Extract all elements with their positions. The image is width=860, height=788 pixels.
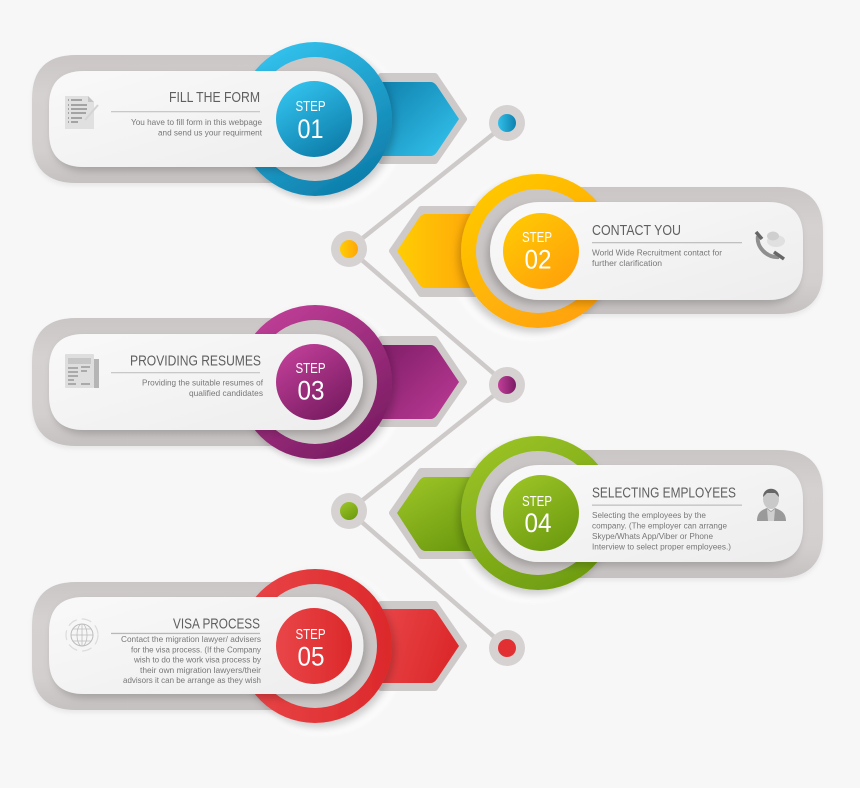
step label 04: STEP <box>522 493 552 510</box>
panel: step 03 providing resumes <box>32 304 464 472</box>
node: blue dot <box>489 105 525 141</box>
step label 03 <box>296 360 326 406</box>
text: step 03 description <box>142 378 264 398</box>
node: yellow dot <box>331 231 367 267</box>
step label 05 <box>296 626 326 672</box>
icon: telephone <box>756 232 785 259</box>
text: step 05 description: their own migration lawyers/their <box>140 665 261 675</box>
text: step 03 description: Providing the suitable resumes of <box>142 378 264 388</box>
heading: visa process: VISA PROCESS <box>173 616 260 632</box>
text: step 01 description: and send us your requirment <box>158 128 263 138</box>
text: step 02 description: World Wide Recruitment contact for <box>592 248 722 258</box>
icon: globe <box>66 619 98 651</box>
text: step 05 description: Contact the migration lawyer/ advisers <box>121 634 261 644</box>
node: purple dot <box>489 367 525 403</box>
panel: step 01 fill the form <box>32 41 464 209</box>
step label 01: STEP <box>296 98 326 115</box>
panel: step 02 contact you <box>392 173 823 341</box>
text: step 05 description: advisors it can be arrange as they wish <box>123 675 261 685</box>
icon: form document <box>65 96 98 129</box>
text: step 04 description: Selecting the employees by the <box>592 510 706 520</box>
heading: contact you: CONTACT YOU <box>592 222 681 239</box>
text: step 05 description: wish to do the work visa process by <box>133 654 262 664</box>
text: step 04 description: company. (The employer can arrange <box>592 520 727 530</box>
step label 02: 02 <box>524 244 552 274</box>
step label 04: 04 <box>524 508 552 538</box>
step label 05: 05 <box>298 642 324 672</box>
heading: providing resumes: PROVIDING RESUMES <box>130 352 261 370</box>
panel: step 04 selecting employees <box>392 435 823 603</box>
step label 02: STEP <box>522 229 552 246</box>
text: step 05 description <box>121 634 262 685</box>
heading: selecting employees: SELECTING EMPLOYEES <box>592 484 736 502</box>
step label 05: STEP <box>296 626 326 643</box>
step label 03: STEP <box>296 360 326 377</box>
step label 02 <box>522 229 552 274</box>
text: step 04 description: Interview to select proper employees.) <box>592 542 731 552</box>
node: red dot <box>489 630 525 666</box>
step label 04 <box>522 493 552 538</box>
step label 01: 01 <box>298 114 324 144</box>
text: step 05 description: for the visa process. (If the Company <box>131 644 262 654</box>
text: step 03 description: qualified candidates <box>189 388 263 398</box>
text: step 04 description: Skype/Whats App/Viber or Phone <box>592 531 713 541</box>
icon: newspaper <box>65 354 99 388</box>
step label 01 <box>296 98 326 144</box>
node: green dot <box>331 493 367 529</box>
connector lines <box>349 123 507 648</box>
text: step 01 description <box>131 117 263 138</box>
text: step 02 description: further clarification <box>592 258 662 268</box>
text: step 01 description: You have to fill form in this webpage <box>131 117 262 127</box>
panel: step 05 visa process <box>32 568 464 736</box>
text: step 02 description <box>592 248 722 268</box>
text: step 04 description <box>592 510 731 552</box>
heading: fill the form: FILL THE FORM <box>169 89 260 106</box>
step label 03: 03 <box>298 376 324 406</box>
icon: person <box>757 489 786 521</box>
